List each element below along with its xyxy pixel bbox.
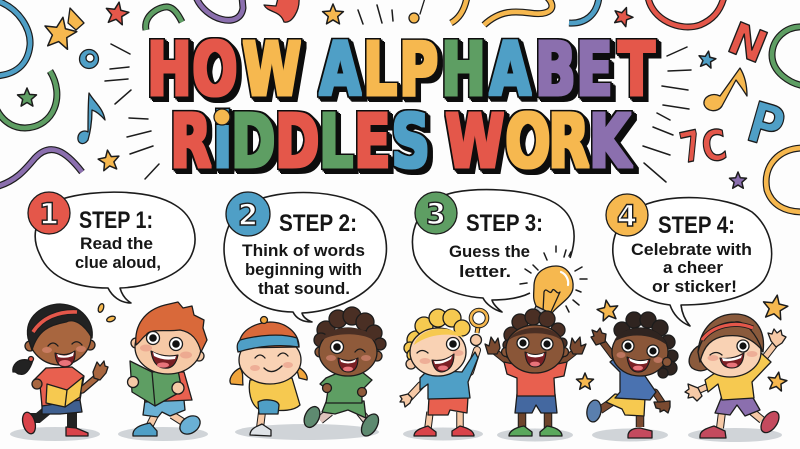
letter P: P [740, 90, 791, 162]
motion lines around title [105, 5, 691, 182]
child: curly blond boy holding a magnifier [400, 309, 487, 440]
step 1 text: Read the [80, 234, 153, 253]
letter C: C [699, 120, 730, 172]
panel: step 4 [576, 194, 789, 442]
panel: step 3 [400, 190, 587, 442]
step 3 text [449, 242, 530, 281]
child: girl with red headband in yellow shirt [685, 314, 786, 442]
number badge 2: 2 [238, 198, 258, 232]
letter 7: 7 [676, 120, 706, 173]
title: E [354, 99, 391, 185]
yellow dash top [451, 0, 467, 23]
step 1 text [75, 234, 161, 272]
speech bubble 2 [224, 193, 386, 322]
green ribbon right [772, 27, 800, 86]
title: W [446, 99, 504, 185]
child: girl with dark curls in blue shirt [585, 312, 678, 442]
title: O [505, 99, 551, 185]
step 1 text: clue aloud, [75, 253, 161, 272]
title: E [576, 27, 613, 113]
panel: step 2 [224, 192, 386, 440]
step 2 heading: STEP 2: [279, 210, 357, 237]
panel: step 1 [10, 192, 208, 441]
child: curly-haired boy in green [301, 307, 386, 439]
yellow squiggle top [484, 0, 552, 25]
decorative doodles: ribbons, stars, notes and letters [0, 0, 800, 212]
speech bubble 3 [412, 190, 574, 312]
title: H [147, 27, 192, 113]
number badge 2 [226, 192, 270, 236]
blue ribbon top right [569, 0, 599, 23]
title: K [589, 99, 632, 185]
child: girl reading a yellow book [10, 304, 108, 441]
purple ribbon left [0, 150, 82, 187]
letter N: N [721, 13, 774, 74]
step 3 heading: STEP 3: [466, 210, 543, 237]
step 2 text [242, 241, 365, 298]
icon: yellow star top [323, 4, 343, 24]
number badge 3 [415, 192, 457, 234]
step 2 text: beginning with [245, 260, 362, 279]
step 1 heading: STEP 1: [79, 207, 153, 234]
number badge 1 [28, 192, 70, 234]
icon: blue ring [80, 50, 98, 68]
icon: blue music note [78, 93, 105, 144]
child: boy with raised arms under the bulb [485, 309, 586, 442]
title: B [535, 27, 576, 113]
title [147, 27, 655, 185]
title: i [213, 99, 232, 185]
step 4 heading: STEP 4: [658, 212, 735, 239]
icon: red star [104, 0, 130, 26]
title: W [242, 27, 301, 113]
title: H [441, 27, 486, 113]
step 4 text: Celebrate with [631, 240, 752, 259]
step 3 text: letter. [459, 262, 511, 281]
title: P [399, 27, 438, 113]
step 4 text [631, 240, 752, 296]
title: L [363, 27, 397, 113]
icon: purple star [729, 172, 747, 188]
icon: blue star right [697, 50, 717, 69]
purple ribbon top [196, 0, 243, 20]
icon: green star [18, 88, 36, 106]
title: A [490, 27, 531, 113]
yellow ribbon right [766, 148, 800, 212]
step 2 text: that sound. [258, 279, 350, 298]
number badge 4 [606, 194, 648, 236]
title: O [192, 27, 238, 113]
green ribbon left [0, 71, 57, 128]
number badge 1: 1 [39, 197, 59, 231]
step 3 text: Guess the [449, 242, 530, 261]
title: D [275, 99, 319, 185]
title: L [319, 99, 353, 185]
icon: red star top right [611, 4, 635, 28]
red blob top [264, 0, 299, 22]
speech bubble 4 [613, 198, 772, 326]
step 4 text: or sticker! [652, 277, 737, 296]
title: T [618, 27, 655, 113]
sound marks [97, 303, 116, 323]
number badge 3: 3 [426, 197, 446, 231]
step 4 text: a cheer [663, 258, 723, 277]
icon: stars around step 4 [576, 293, 789, 392]
title: D [231, 99, 275, 185]
icon: big yellow star [42, 8, 84, 50]
title: R [170, 99, 211, 185]
title: A [320, 27, 361, 113]
title: R [548, 99, 589, 185]
child: smiling child with hat and headband [230, 316, 379, 440]
step 2 text: Think of words [242, 241, 365, 260]
icon: yellow star left [97, 149, 121, 171]
child: boy reading a green book [118, 302, 208, 441]
title: S [392, 99, 430, 185]
icon: glowing light bulb [520, 246, 587, 323]
number badge 4: 4 [617, 199, 637, 233]
blue ribbon top left [0, 0, 30, 76]
speech bubble 1 [35, 192, 195, 303]
red ribbon top right [648, 0, 724, 27]
green ribbon top [146, 7, 182, 30]
icon: green note top [409, 0, 425, 23]
yellow dot on the i [214, 109, 230, 125]
icon: yellow music note [704, 68, 747, 111]
